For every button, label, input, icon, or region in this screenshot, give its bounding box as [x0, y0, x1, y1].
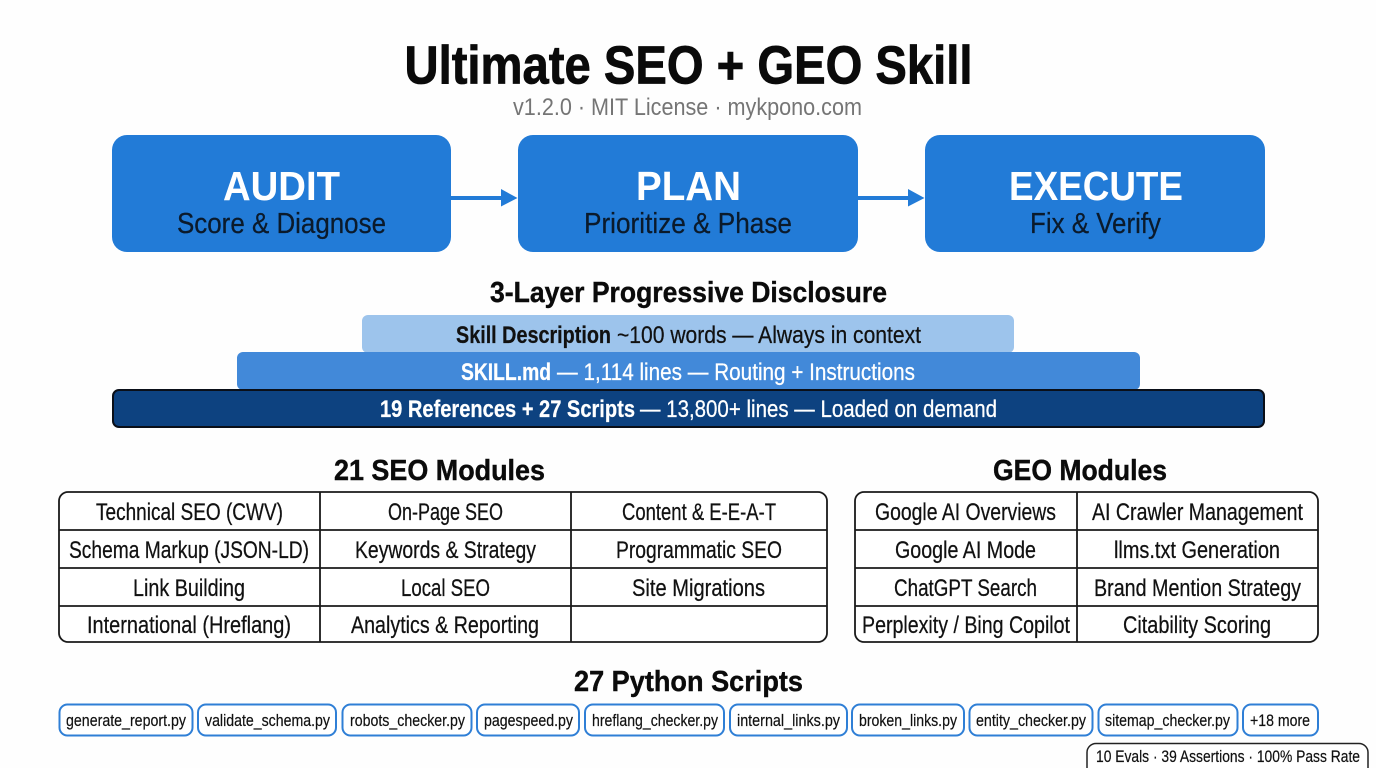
subtitle: v1.2.0 · MIT License · mykpono.com [513, 94, 862, 121]
heading: geo modules: GEO Modules [993, 455, 1167, 487]
chip: sitemap_checker.py: sitemap_checker.py [1105, 711, 1230, 730]
title: Ultimate SEO + GEO Skill [404, 36, 972, 96]
panel: plan [518, 135, 858, 252]
chip: hreflang_checker.py [585, 704, 724, 736]
chip: broken_links.py: broken_links.py [859, 711, 957, 730]
table: seo modules: On-Page SEO [388, 499, 503, 526]
chip: robots_checker.py: robots_checker.py [350, 711, 465, 730]
chip: internal_links.py [730, 704, 847, 736]
table: geo modules: AI Crawler Management [1092, 499, 1303, 526]
table: seo modules: Link Building [133, 575, 245, 602]
layer 2: skill.md: SKILL.md [461, 359, 551, 386]
layer 3: references and scripts: 19 References + 27 Scripts [380, 396, 635, 423]
table: geo modules: Google AI Overviews [875, 499, 1056, 526]
table: geo modules: llms.txt Generation [1114, 537, 1280, 564]
table: geo modules [855, 492, 1318, 642]
panel: execute [925, 135, 1265, 252]
panel: plan: PLAN [636, 163, 741, 209]
panel: audit: AUDIT [223, 163, 340, 209]
table: geo modules: ChatGPT Search [894, 575, 1037, 602]
chip: generate_report.py: generate_report.py [66, 711, 186, 730]
chip: hreflang_checker.py: hreflang_checker.py [592, 711, 718, 730]
table: seo modules: International (Hreflang) [87, 612, 291, 639]
script chips [60, 704, 1318, 736]
table: seo modules: Local SEO [401, 575, 490, 602]
table: seo modules: Technical SEO (CWV) [96, 499, 283, 526]
workflow: audit plan execute [112, 135, 1265, 252]
chip: broken_links.py [852, 704, 964, 736]
table: geo modules: Perplexity / Bing Copilot [862, 612, 1070, 639]
chip: validate_schema.py [198, 704, 336, 736]
panel: audit [112, 135, 451, 252]
layer 1: skill description: ~100 words — Always in context [617, 322, 921, 349]
layer 3: references and scripts [113, 390, 1264, 427]
chip: pagespeed.py: pagespeed.py [484, 711, 573, 730]
layer 2: skill.md [237, 352, 1140, 390]
arrow: plan to execute [858, 189, 924, 206]
table: seo modules: Content & E-E-A-T [622, 499, 776, 526]
panel: execute: EXECUTE [1009, 163, 1183, 209]
table: seo modules [59, 492, 827, 642]
table: seo modules: Keywords & Strategy [355, 537, 536, 564]
layer 3: references and scripts: — 13,800+ lines — Loaded on demand [640, 396, 997, 423]
panel: plan: Prioritize & Phase [584, 208, 792, 240]
chip: entity_checker.py: entity_checker.py [976, 711, 1086, 730]
panel: execute: Fix & Verify [1030, 208, 1161, 240]
table: seo modules: Programmatic SEO [616, 537, 782, 564]
table: geo modules: Citability Scoring [1123, 612, 1271, 639]
heading: 3-layer progressive disclosure: 3-Layer Progressive Disclosure [490, 277, 887, 309]
chip: sitemap_checker.py [1098, 704, 1238, 736]
layer 2: skill.md: — 1,114 lines — Routing + Instructions [557, 359, 915, 386]
chip: internal_links.py: internal_links.py [737, 711, 840, 730]
table: geo modules: Brand Mention Strategy [1094, 575, 1301, 602]
chip: generate_report.py [60, 704, 192, 736]
heading: 27 python scripts: 27 Python Scripts [574, 666, 803, 698]
heading: 21 seo modules: 21 SEO Modules [334, 455, 545, 487]
layer 1: skill description: Skill Description [456, 322, 611, 349]
panel: audit: Score & Diagnose [177, 208, 386, 240]
layer 1: skill description [362, 315, 1014, 353]
arrow: audit to plan [451, 189, 518, 206]
chip: validate_schema.py: validate_schema.py [205, 711, 330, 730]
table: seo modules: Analytics & Reporting [351, 612, 539, 639]
chip: +18 more [1243, 704, 1318, 736]
table: seo modules: Schema Markup (JSON-LD) [69, 537, 309, 564]
chip: entity_checker.py [970, 704, 1092, 736]
table: seo modules: Site Migrations [632, 575, 765, 602]
table: geo modules: Google AI Mode [895, 537, 1036, 564]
chip: pagespeed.py [477, 704, 579, 736]
chip: +18 more: +18 more [1250, 711, 1310, 730]
layered disclosure stack [113, 315, 1264, 427]
chip: robots_checker.py [342, 704, 472, 736]
